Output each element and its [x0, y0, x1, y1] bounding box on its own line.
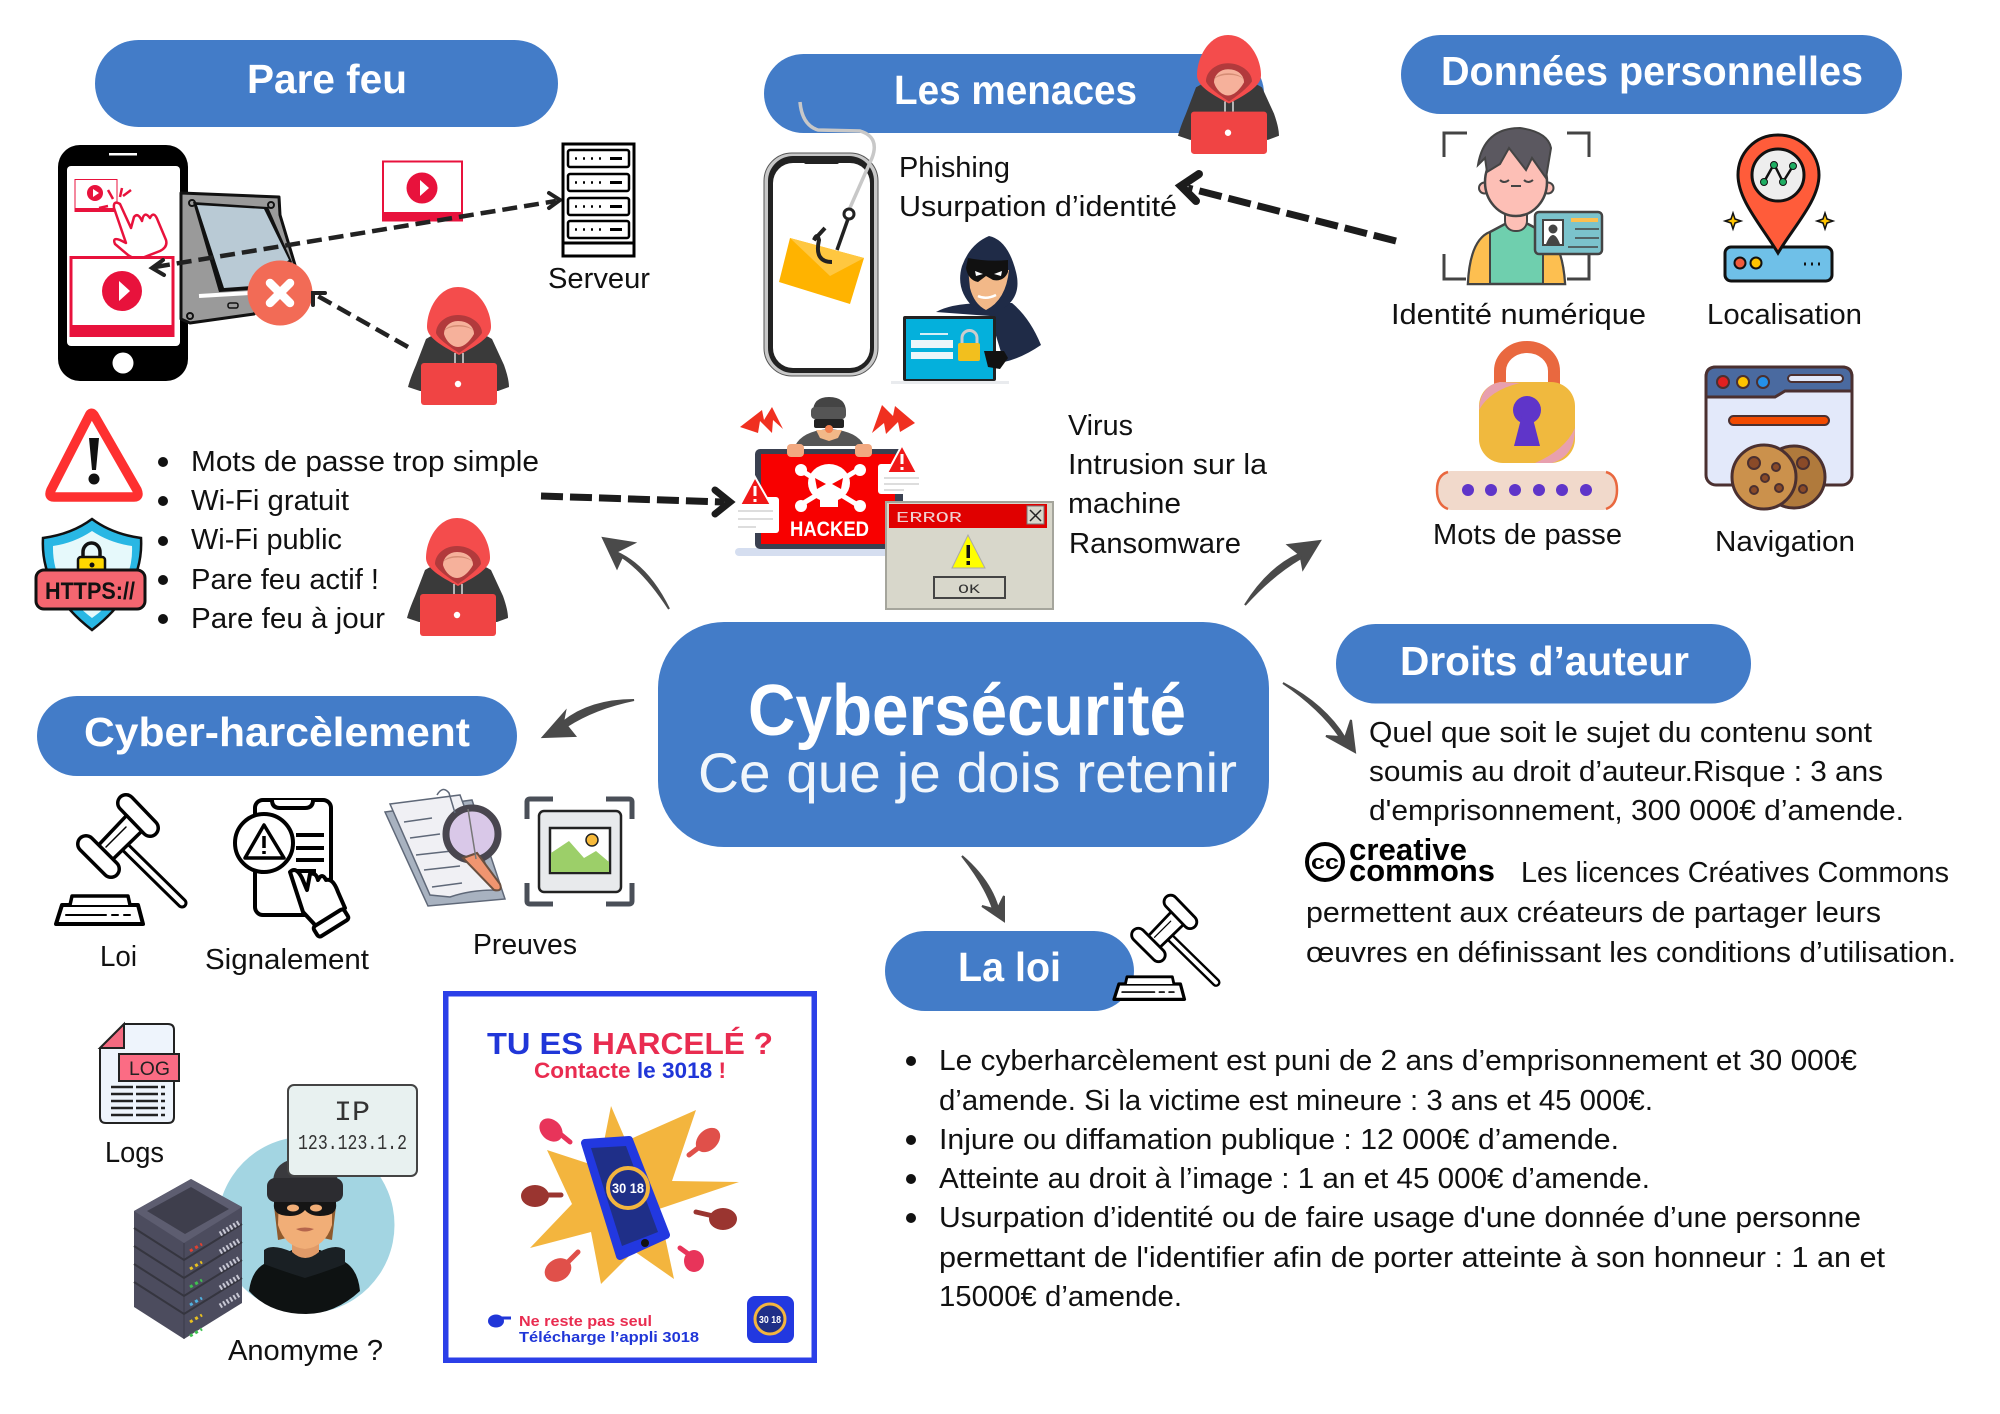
text: phishing: [899, 152, 1177, 223]
callout: IP address: 123.123.1.2: [298, 1133, 407, 1156]
icon: phone with video: [58, 145, 188, 381]
text: virus: Ransomware: [1069, 528, 1241, 560]
heading: Pare feu: [95, 40, 558, 127]
icon: video packet: [383, 162, 462, 220]
list: firewall risks: Pare feu actif !: [191, 564, 379, 596]
text: copyright: [1369, 717, 1904, 827]
arrow: personal data to threats: [1181, 174, 1396, 241]
arrow: dashed to virus: [541, 490, 730, 514]
text: Creative Commons: [1306, 857, 1956, 969]
icon: hacker near list: [407, 518, 508, 636]
icon: error dialog: OK: [958, 582, 980, 597]
icon: log file: LOG: [129, 1059, 170, 1080]
heading: La loi: [885, 931, 1134, 1011]
text: virus: machine: [1068, 488, 1181, 520]
heading: Les menaces: [764, 54, 1264, 133]
logo: creative commons: cc: [1311, 852, 1339, 874]
label: Logs: Logs: [105, 1137, 164, 1169]
list: law: Atteinte au droit à l’image : 1 an et 45 000€ d’amende.: [939, 1163, 1650, 1195]
arrow: center to law: [962, 856, 1004, 921]
list: law: Le cyberharcèlement est puni de 2 ans d’emprisonnement et 30 000€: [939, 1045, 1857, 1077]
list: law: permettant de l'identifier afin de porter atteinte à son honneur : 1 an et: [939, 1242, 1885, 1274]
subtitle: Ce que je dois retenir: [698, 741, 1237, 804]
poster phone: [585, 1140, 666, 1256]
poster subheading: Contacte le 3018 !: [534, 1058, 726, 1083]
icon: padlock and password: [1437, 347, 1617, 510]
label: Signalement: Signalement: [205, 944, 369, 976]
icon: document and magnifier: [385, 789, 505, 906]
icon: log file: [100, 1024, 179, 1123]
list: firewall risks: Wi-Fi public: [191, 524, 342, 556]
icon: anonymous hacker: [218, 1136, 394, 1314]
text: copyright: soumis au droit d’auteur.Risque : 3 ans: [1369, 756, 1883, 788]
logo: creative commons: creative: [1349, 832, 1467, 867]
list: law: Usurpation d’identité ou de faire usage d'une donnée d’une personne: [939, 1202, 1861, 1234]
icon: HTTPS shield: HTTPS://: [45, 578, 135, 605]
logo: creative commons: commons: [1349, 853, 1495, 888]
label: Navigation: Navigation: [1715, 526, 1855, 558]
label: Serveur: Serveur: [548, 263, 651, 295]
icon: server stack: [134, 1179, 242, 1339]
icon: gavel: [56, 803, 182, 924]
text: Creative Commons: Les licences Créatives Commons: [1521, 857, 1949, 889]
text: virus: Intrusion sur la: [1068, 449, 1267, 481]
arrow: center to harassment: [543, 700, 634, 737]
arrow: server to phone: [152, 193, 560, 275]
icon: hacker near firewall: [408, 287, 509, 405]
list: law: [906, 1045, 1885, 1313]
list: law: Injure ou diffamation publique : 12 000€ d’amende.: [939, 1124, 1619, 1156]
poster: 3018: 30 18: [612, 1180, 644, 1196]
heading: Pare feu: Pare feu: [247, 56, 407, 102]
icon: hacker on heading: [1178, 35, 1279, 154]
icon: hacked laptop: [735, 397, 919, 556]
heading: Données personnelles: [1401, 35, 1902, 114]
text: Creative Commons: permettent aux créateurs de partager leurs: [1306, 897, 1881, 929]
text: phishing: Phishing: [899, 152, 1010, 184]
icon: error dialog: ERROR: [896, 510, 962, 527]
icon: firewall door: [181, 193, 295, 323]
text: copyright: Quel que soit le sujet du contenu sont: [1369, 717, 1872, 749]
text: phishing: Usurpation d’identité: [899, 191, 1177, 223]
poster footer text: [488, 1314, 504, 1328]
icon: error dialog: [886, 502, 1053, 609]
callout: IP address: IP: [334, 1098, 370, 1129]
label: Localisation: Localisation: [1707, 299, 1862, 331]
poster: 3018: [446, 994, 814, 1360]
icon: masked hacker with laptop: [891, 236, 1041, 384]
arrow: center to copyright: [1283, 683, 1355, 752]
icon: HTTPS shield: [36, 519, 145, 630]
logo: creative commons: [1307, 832, 1495, 888]
text: copyright: d'emprisonnement, 300 000€ d’amende.: [1369, 795, 1904, 827]
arrow: hacker blocked by firewall: [313, 293, 408, 347]
icon: browser with cookies: [1706, 367, 1852, 509]
heading: Cyber-harcèlement: Cyber-harcèlement: [84, 709, 470, 755]
text: virus: [1068, 410, 1267, 560]
heading: La loi: La loi: [958, 944, 1061, 990]
heading: Droits d'auteur: Droits d’auteur: [1400, 638, 1689, 684]
poster headline: TU ES: [487, 1026, 583, 1061]
icon: digital identity person: [1444, 128, 1602, 284]
heading: Données personnelles: Données personnelles: [1441, 48, 1863, 94]
poster: 3018: 30 18: [759, 1315, 781, 1326]
text: Creative Commons: œuvres en définissant les conditions d’utilisation.: [1306, 937, 1956, 969]
arrow: center to firewall: [603, 538, 669, 609]
icon: location pin: [1725, 135, 1833, 281]
list: law: 15000€ d’amende.: [939, 1281, 1182, 1313]
icon: server: [563, 144, 634, 256]
center panel: Cybersécurité: [658, 622, 1269, 847]
label: Loi: Loi: [100, 941, 137, 973]
main title: Cybersécurité: [748, 671, 1186, 751]
list: firewall risks: Mots de passe trop simple: [191, 446, 539, 478]
icon: phishing phone: [764, 102, 878, 376]
icon: blocked cross: [248, 260, 312, 326]
heading: Cyber-harcèlement: [37, 696, 517, 776]
text: virus: Virus: [1068, 410, 1133, 442]
pointing hands: [521, 1114, 737, 1287]
poster: 3018: Ne reste pas seul: [519, 1314, 652, 1330]
icon: report on phone: [235, 800, 349, 938]
starburst: [530, 1106, 739, 1284]
heading: Droits d'auteur: [1336, 624, 1751, 704]
icon: warning triangle: [50, 413, 138, 497]
label: Preuves: Preuves: [473, 929, 577, 961]
label: Anomyme: Anomyme ?: [228, 1335, 383, 1367]
icon: gavel by La loi: [1114, 902, 1216, 999]
icon: hacked laptop: HACKED: [790, 518, 869, 541]
arrow: center to personal data: [1245, 541, 1320, 605]
poster: 3018: Télécharge l’appli 3018: [519, 1330, 699, 1346]
callout: IP address: [288, 1085, 417, 1176]
poster: 3018: HARCELÉ ?: [592, 1026, 773, 1061]
heading: Les menaces: Les menaces: [894, 67, 1137, 113]
label: Identité numérique: Identité numérique: [1391, 299, 1646, 331]
list: firewall risks: Pare feu à jour: [191, 603, 386, 635]
list: firewall risks: [158, 446, 539, 635]
list: firewall risks: Wi-Fi gratuit: [191, 485, 349, 517]
poster app icon: [747, 1296, 794, 1343]
label: Mots de passe: Mots de passe: [1433, 519, 1622, 551]
list: law: d’amende. Si la victime est mineure : 3 ans et 45 000€.: [939, 1085, 1653, 1117]
icon: image evidence frame: [527, 799, 632, 904]
